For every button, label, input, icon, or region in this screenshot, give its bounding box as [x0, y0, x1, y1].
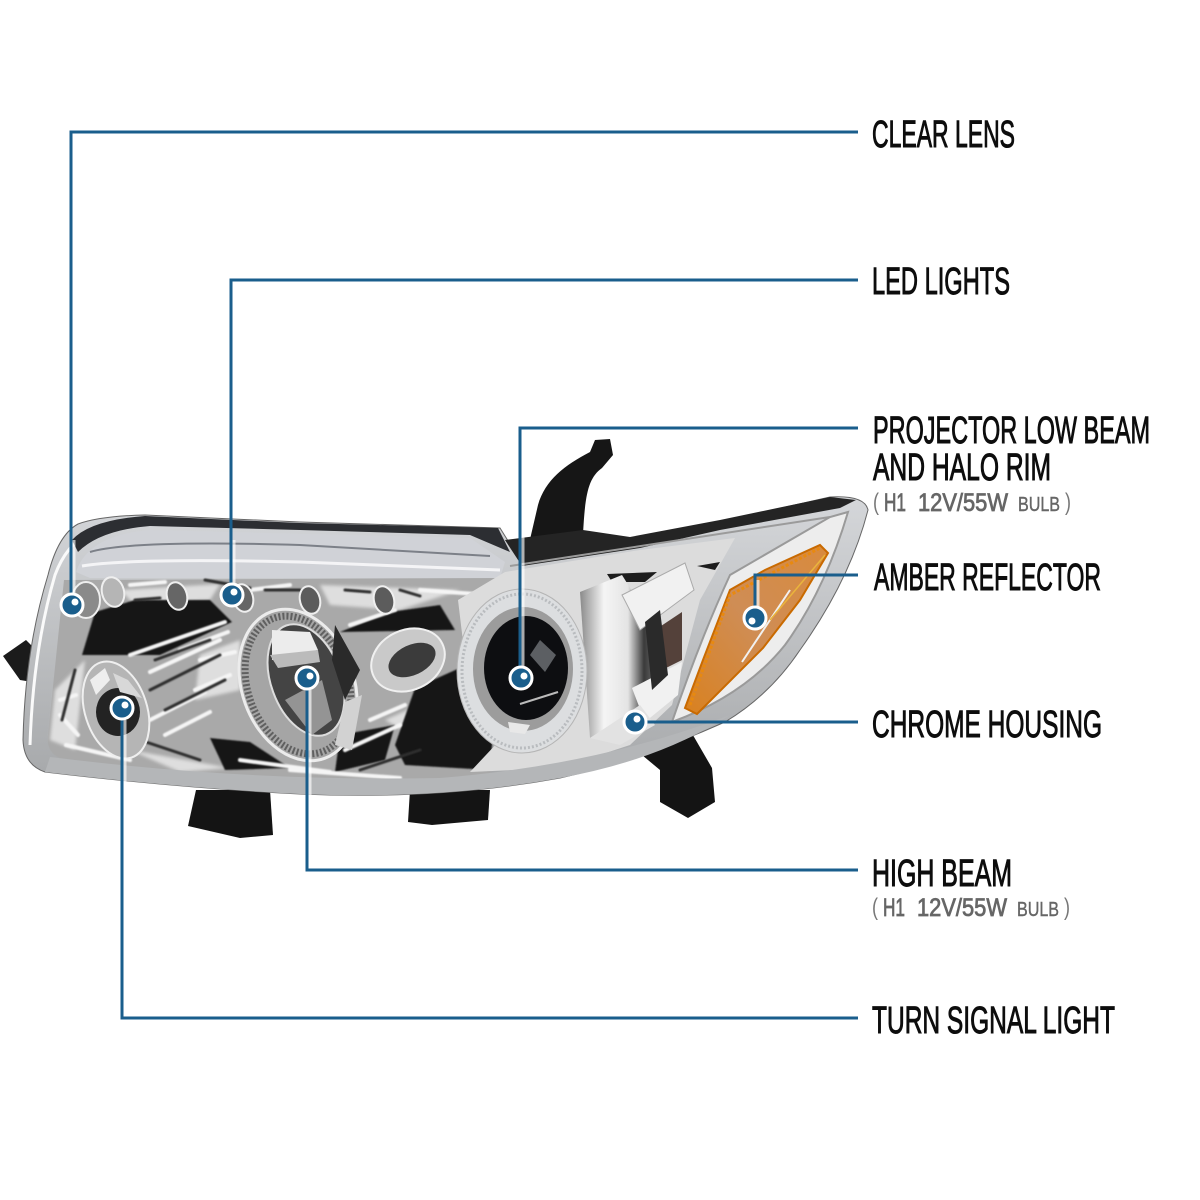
- label: high beam: (: [872, 894, 878, 921]
- line: clear lens: [71, 132, 858, 605]
- rear dark band right: [505, 497, 856, 566]
- projector lens: [484, 616, 568, 720]
- left trim highlight: [30, 532, 90, 745]
- lower left mounting tab: [3, 640, 36, 682]
- dark reflector areas: [82, 600, 500, 772]
- line: amber reflector: [755, 575, 858, 618]
- projector barrel: [580, 563, 694, 745]
- clear lens upper band left: [76, 530, 505, 578]
- label: projector low beam and halo rim: AND HALO RIM: [873, 447, 1051, 489]
- upper chrome streaks: [607, 562, 720, 582]
- headlight assembly: [3, 439, 868, 838]
- line: turn signal: [122, 708, 858, 1018]
- label: projector low beam and halo rim: BULB: [1018, 494, 1060, 516]
- callout light halos: [74, 510, 758, 795]
- label: high beam: HIGH BEAM: [872, 853, 1012, 895]
- line: projector low beam: [520, 428, 858, 678]
- callout lines: [71, 132, 858, 1018]
- label: high beam: ): [1064, 894, 1070, 921]
- small projector reflector: [361, 617, 455, 703]
- lower mounting tabs: [188, 730, 715, 838]
- high beam ring: [219, 593, 377, 777]
- chrome lens lines: [510, 517, 830, 566]
- chrome dark streaks: [62, 580, 420, 770]
- line: high beam: [307, 678, 858, 870]
- marker: chrome housing: [624, 711, 646, 733]
- chrome streaks: [60, 582, 490, 778]
- amber reflector: [685, 545, 828, 714]
- LED lights row: [72, 575, 397, 618]
- marker: high beam: [296, 667, 318, 689]
- marker: turn signal: [111, 697, 133, 719]
- right chrome interior: [458, 538, 735, 772]
- marker: amber reflector: [744, 607, 766, 629]
- label: high beam: BULB: [1017, 899, 1059, 921]
- label: high beam: H1: [883, 894, 905, 922]
- marker: clear lens: [61, 594, 83, 616]
- label: clear lens: CLEAR LENS: [872, 114, 1015, 156]
- marker: LED lights: [221, 584, 243, 606]
- amber glass surround: [672, 512, 848, 722]
- left interior chrome: [48, 578, 500, 781]
- rear mounting bracket: [528, 439, 613, 548]
- label: projector low beam and halo rim: (: [873, 489, 879, 516]
- line: LED lights: [231, 280, 858, 594]
- label: LED lights: LED LIGHTS: [872, 261, 1010, 303]
- label: projector low beam and halo rim: ): [1065, 489, 1071, 516]
- label: projector low beam and halo rim: 12V/55W: [918, 489, 1008, 517]
- label: high beam: 12V/55W: [917, 894, 1007, 922]
- dark top edge left: [72, 516, 510, 552]
- projector halo ring: [457, 589, 587, 753]
- label: projector low beam and halo rim: [873, 410, 1150, 517]
- lower chrome trim: [45, 715, 730, 795]
- turn signal reflector: [71, 653, 161, 767]
- marker: projector: [510, 667, 532, 689]
- light reflector patches: [50, 584, 460, 772]
- outer lens silhouette: [23, 497, 868, 795]
- label: high beam: [872, 853, 1070, 922]
- line: chrome housing: [635, 720, 858, 724]
- label: projector low beam and halo rim: H1: [884, 489, 906, 517]
